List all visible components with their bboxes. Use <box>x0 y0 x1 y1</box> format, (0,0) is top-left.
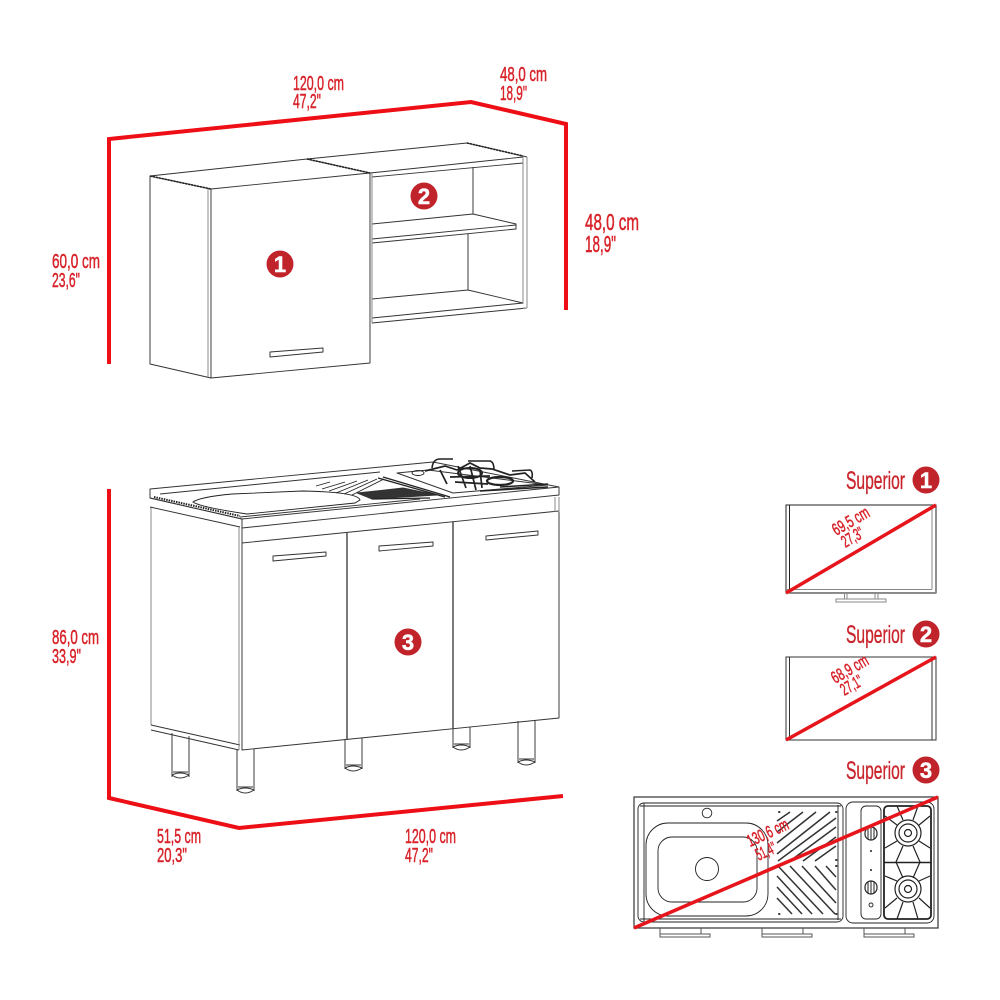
countertop <box>150 462 559 528</box>
diagonal label: 69,5 cm <box>829 503 873 539</box>
dimension label: base width: 47,2" <box>405 845 433 867</box>
diagonal label <box>744 815 798 865</box>
heading: Superior 2: Superior <box>846 621 905 649</box>
diagonal label: 130,6 cm <box>744 815 792 851</box>
dimension label: upper cabinet 1 height: 60,0 cm <box>52 251 100 273</box>
tap hole <box>702 808 712 818</box>
dimension label: upper width <box>293 73 344 113</box>
heading: Superior 1: 1 <box>920 468 932 493</box>
wall cabinet 1 <box>150 159 372 378</box>
dimension label: base height <box>52 627 99 668</box>
top view: cabinet 2 <box>786 651 936 740</box>
dimension label: upper cabinet 1 height <box>52 251 100 292</box>
dimension label: base width: 120,0 cm <box>405 826 456 848</box>
drainer ribs <box>777 812 836 914</box>
heading: Superior 3: Superior <box>846 757 905 785</box>
dimension label: base width <box>405 826 456 867</box>
hob <box>397 459 548 493</box>
diagonal label <box>829 503 880 552</box>
diagonal label: 68,9 cm <box>828 651 872 687</box>
heading: Superior 2: 2 <box>920 622 932 647</box>
diagonal label: 27,1" <box>837 671 866 699</box>
burner grate <box>884 806 931 919</box>
dimension label: upper depth: 18,9" <box>500 83 527 105</box>
dimension label: base depth: 20,3" <box>157 845 187 867</box>
dimension label: base height: 86,0 cm <box>52 627 99 649</box>
dimension line: base cabinet <box>109 489 563 828</box>
drainer ribs <box>316 477 450 499</box>
sink basin <box>646 823 768 916</box>
dimension label: upper width: 47,2" <box>293 91 321 113</box>
drainer and sink tray <box>638 803 843 922</box>
cabinet 1 handle <box>270 348 323 357</box>
dimension label: upper depth <box>500 64 547 105</box>
number badge 3: 3 <box>402 630 414 655</box>
control strip <box>861 806 881 919</box>
dimension label: upper width: 120,0 cm <box>293 73 344 95</box>
number badge 1: 1 <box>274 252 286 277</box>
heading: Superior 1: Superior <box>846 467 905 495</box>
number badge 2: 2 <box>418 184 430 209</box>
dimension label: upper cabinet 1 height: 23,6" <box>52 270 80 292</box>
top view: countertop with sink and hob <box>634 797 938 937</box>
dimension label: upper cabinet 2 height: 18,9" <box>585 231 616 257</box>
sink basin <box>193 491 360 514</box>
base cabinet with sink and hob <box>150 459 559 793</box>
dimension label: base depth <box>157 826 201 867</box>
number badge 1 <box>266 250 294 278</box>
dimension line: upper cabinets <box>109 102 566 364</box>
dimension label: upper depth: 48,0 cm <box>500 64 547 86</box>
feet <box>660 928 914 937</box>
hob plate <box>846 802 934 923</box>
carcass <box>150 507 152 725</box>
number badge 3 <box>394 628 422 656</box>
heading: Superior 3: 3 <box>920 758 932 783</box>
top view: cabinet 1 <box>786 503 936 602</box>
diagonal label: 27,3" <box>838 523 867 551</box>
dimension label: base height: 33,9" <box>52 646 81 668</box>
diagonal label: 51,4" <box>752 838 779 864</box>
dimension label: base depth: 51,5 cm <box>157 826 201 848</box>
legs <box>172 720 535 793</box>
dimension label: upper cabinet 2 height <box>585 209 639 257</box>
door handles <box>273 552 326 561</box>
number badge 2 <box>410 182 438 210</box>
diagonal label <box>828 651 879 700</box>
dimension label: upper cabinet 2 height: 48,0 cm <box>585 209 639 235</box>
open shelf cabinet 2 <box>307 143 527 323</box>
